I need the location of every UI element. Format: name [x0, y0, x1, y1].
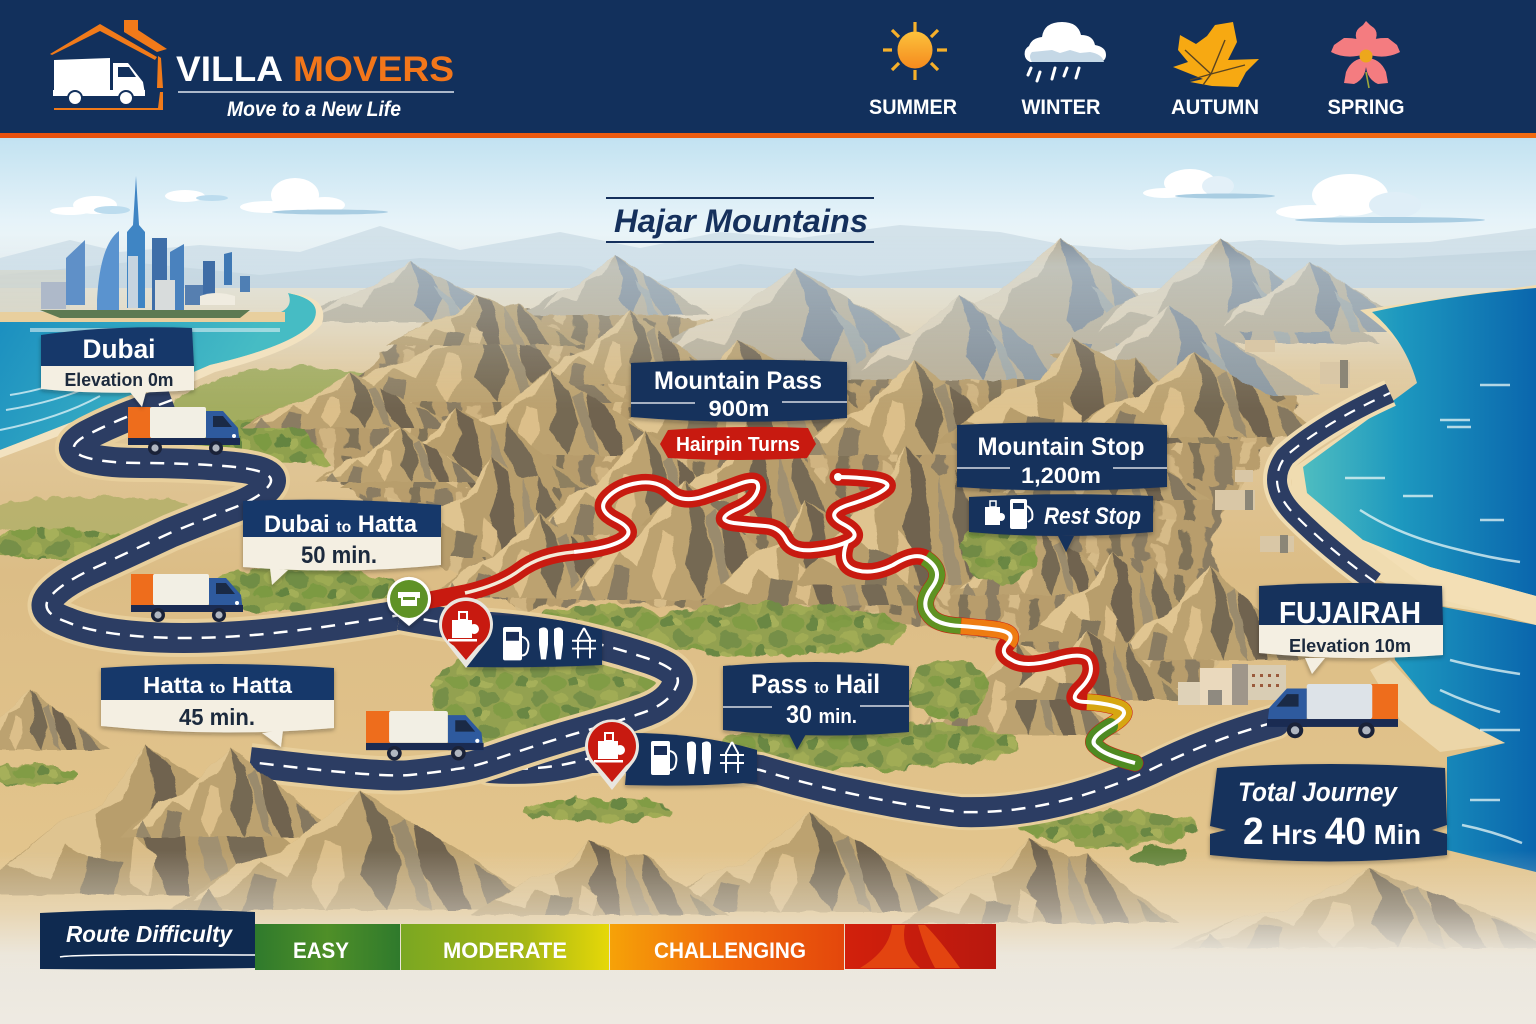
sea: Dubai coast	[0, 293, 323, 458]
mountain range	[240, 238, 1425, 735]
bottom sand fade	[0, 850, 1536, 1024]
stop marker: green rest point	[387, 577, 431, 626]
callout: Fujairah	[1259, 583, 1443, 674]
season: autumn: AUTUMN	[1171, 96, 1259, 119]
callout: Mountain Pass: Mountain Pass	[654, 367, 822, 395]
callout: Mountain Pass	[631, 360, 847, 422]
season: autumn	[1171, 22, 1259, 119]
truck: Dubai to Hatta	[131, 574, 243, 622]
logo: Villa Movers	[50, 20, 454, 121]
label: Hairpin Turns: Hairpin Turns	[676, 434, 800, 456]
callout: Mountain Stop: Mountain Stop	[978, 433, 1144, 461]
background: sky	[0, 138, 1536, 288]
truck: Dubai	[128, 407, 240, 455]
legend heading: Route Difficulty	[66, 921, 233, 947]
callout: Rest Stop: Rest Stop	[1044, 503, 1141, 530]
callout: Fujairah: Elevation 10m	[1289, 635, 1411, 656]
tagline: Move to a New Life	[227, 98, 401, 121]
callout: Total Journey: Total Journey	[1238, 777, 1399, 807]
icon: cup and fuel	[985, 499, 1032, 529]
title: Hajar Mountains: Hajar Mountains	[614, 203, 868, 239]
difficulty bar: extreme	[845, 924, 996, 969]
foothill greenery	[170, 367, 450, 614]
atmospheric haze	[0, 235, 1536, 410]
difficulty bar: easy	[255, 924, 400, 970]
icon: house and truck	[50, 20, 167, 110]
callout: Hatta to Hatta	[101, 664, 334, 747]
callout: Pass to Hail	[723, 662, 909, 750]
mountain rock mass	[300, 310, 1300, 690]
season: spring: SPRING	[1328, 96, 1404, 119]
callout: Mountain Stop	[957, 422, 1167, 490]
callout: Pass to Hail: 30 min.	[786, 701, 857, 729]
green valleys	[0, 496, 1200, 866]
season: spring	[1328, 21, 1404, 119]
background: sandy terrain	[0, 288, 1536, 1000]
difficulty bar: easy: EASY	[293, 938, 349, 963]
difficulty bar: challenging: CHALLENGING	[654, 938, 806, 963]
town: Fujairah buildings	[1178, 664, 1286, 705]
sea: Fujairah coast	[1290, 285, 1536, 872]
icon: small coastal buildings	[1215, 340, 1350, 553]
callout: Dubai: Dubai	[82, 334, 156, 364]
city skyline: Dubai	[0, 176, 250, 318]
callout: Rest Stop	[969, 494, 1153, 552]
season: summer	[869, 22, 957, 119]
callout: Hatta to Hatta: Hatta to Hatta	[143, 672, 292, 698]
icon: flower	[1331, 21, 1400, 88]
callout: Mountain Stop: 1,200m	[1021, 463, 1101, 488]
road: east coast	[1277, 393, 1390, 582]
callout: Dubai to Hatta: 50 min.	[301, 542, 377, 569]
label: Hairpin Turns	[660, 427, 816, 460]
icon: sun	[883, 22, 947, 80]
legend: Route Difficulty	[40, 910, 996, 970]
difficulty bar: challenging	[610, 924, 844, 970]
road: Pass to Hail	[490, 722, 1275, 812]
callout: Dubai	[41, 327, 194, 407]
background: distant mountains	[0, 225, 1536, 320]
stop panel: Pass services	[585, 719, 757, 790]
callout: Dubai: Elevation 0m	[64, 369, 174, 390]
road: Dubai to Hatta	[46, 400, 400, 638]
callout: Dubai to Hatta	[243, 500, 441, 585]
callout: Pass to Hail: Pass to Hail	[751, 669, 880, 699]
icon: maple leaf	[1173, 22, 1259, 87]
icon: cloud with rain	[1025, 22, 1106, 81]
brand name: MOVERS	[293, 50, 454, 89]
brand name: VILLA	[176, 50, 283, 89]
header orange stripe	[0, 133, 1536, 138]
callout: Hatta to Hatta: 45 min.	[179, 704, 255, 730]
season: summer: SUMMER	[869, 96, 957, 119]
header bar	[0, 0, 1536, 133]
difficulty bar: moderate: MODERATE	[443, 938, 567, 963]
difficulty bar: moderate	[401, 924, 609, 970]
callout: Fujairah: FUJAIRAH	[1279, 595, 1421, 630]
callout: Total Journey: 2 Hrs 40 Min	[1243, 811, 1421, 853]
callout: Dubai to Hatta: Dubai to Hatta	[264, 511, 418, 538]
callout: Mountain Pass: 900m	[708, 396, 770, 421]
clouds	[50, 169, 1485, 223]
callout: Total Journey	[1210, 764, 1447, 862]
season: winter	[1022, 22, 1106, 119]
truck: Fujairah	[1267, 684, 1398, 738]
foreground mountains	[0, 690, 1536, 948]
truck: Hatta to Hatta	[366, 711, 484, 760]
route: mountain pass	[430, 473, 1135, 763]
legend heading	[40, 910, 255, 969]
stop panel: Hatta services	[439, 597, 602, 668]
road: Hatta to Hatta	[250, 615, 678, 775]
season: winter: WINTER	[1022, 96, 1100, 119]
